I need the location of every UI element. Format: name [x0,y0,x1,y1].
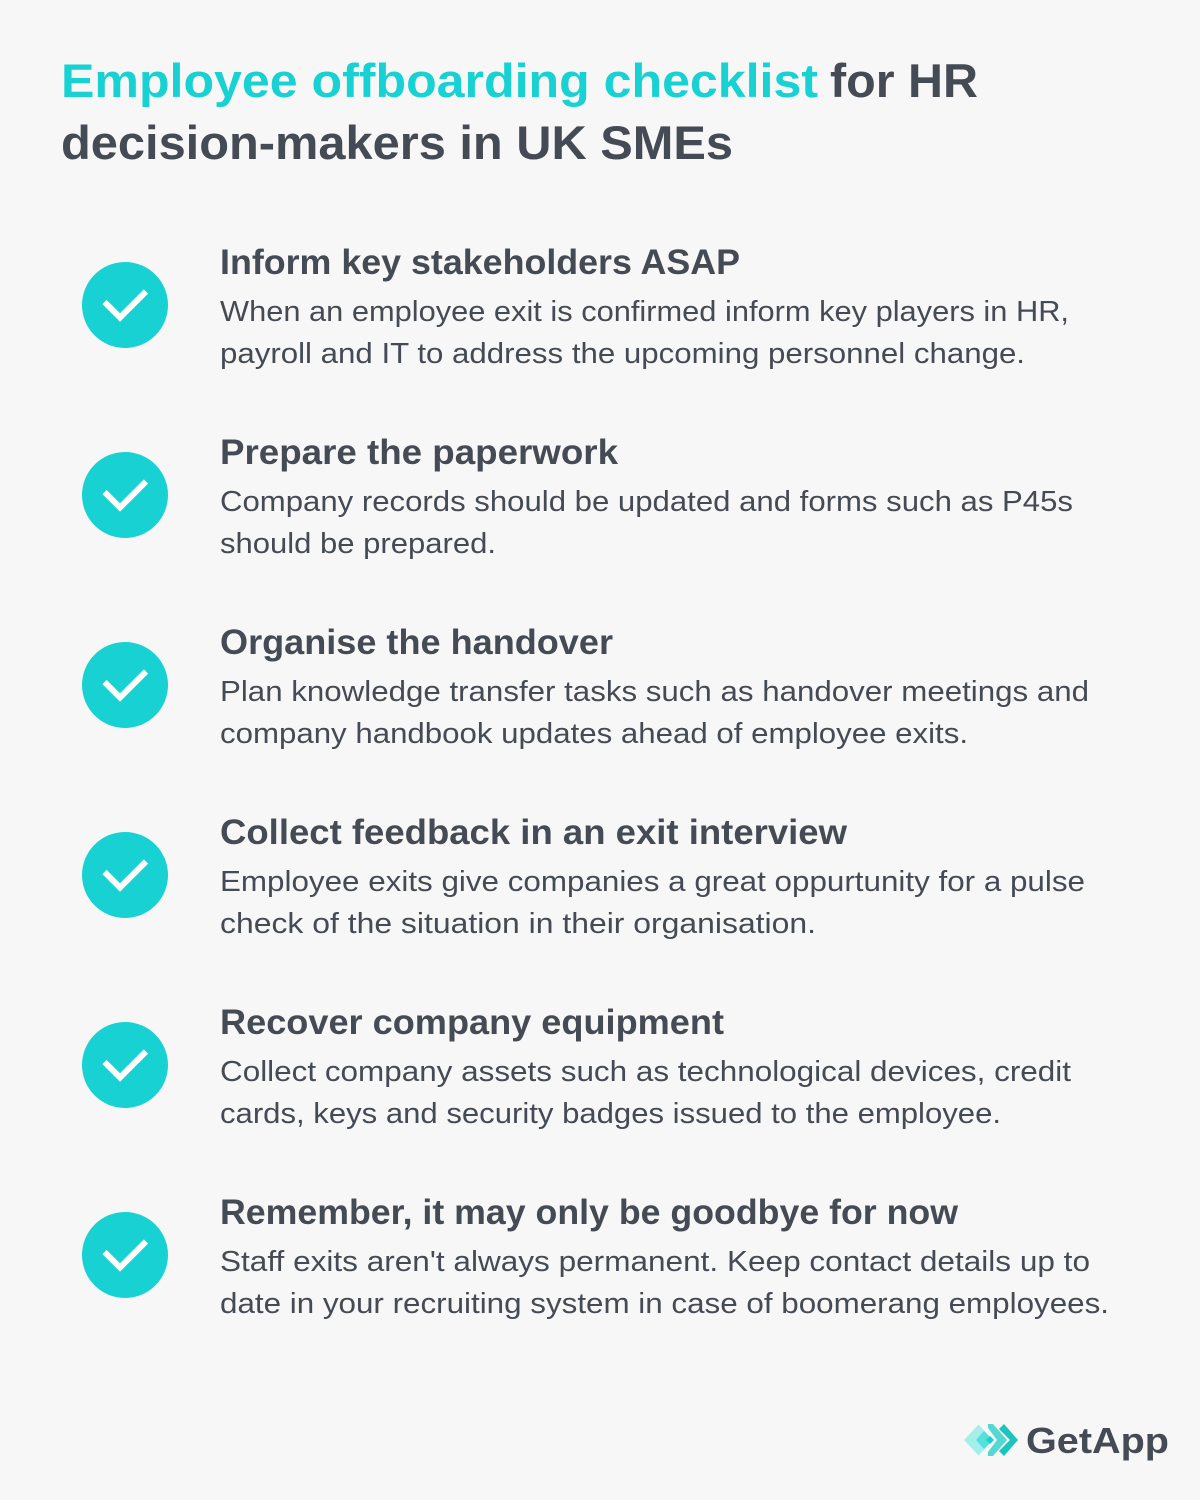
icon: GetApp diamonds [964,1424,1018,1456]
text block: goodbye: Staff exits aren't always permanent. Keep contact details up to [220,1246,1090,1278]
text block: equipment: Collect company assets such as technological devices, credit [220,1056,1071,1088]
text block: paperwork [220,486,1073,560]
text block: paperwork: Company records should be updated and forms such as P45s [220,486,1073,518]
heading: exit interview: Collect feedback in an exit interview [220,813,848,852]
title: Employee offboarding checklist [61,54,818,107]
icon: check circle [82,832,168,918]
text block: exit interview: Employee exits give companies a great oppurtunity for a pulse [220,866,1085,898]
icon: check circle [82,1022,168,1108]
heading: paperwork: Prepare the paperwork [220,433,619,472]
icon: check circle [82,642,168,728]
heading: handover: Organise the handover [220,623,613,662]
checklist item 4 [82,813,1085,940]
text block: exit interview: check of the situation in their organisation. [220,908,816,940]
checklist item 3 [82,623,1089,750]
text block: equipment [220,1056,1071,1130]
text block: paperwork: should be prepared. [220,528,496,560]
title: decision-makers in UK SMEs [61,116,733,169]
text block: handover: company handbook updates ahead of employee exits. [220,718,968,750]
checklist item 1 [82,243,1069,370]
icon: check circle [82,452,168,538]
text block: goodbye [220,1246,1109,1320]
text block: goodbye: date in your recruiting system in case of boomerang employees. [220,1288,1109,1320]
text block: equipment: cards, keys and security badges issued to the employee. [220,1098,1001,1130]
checklist item 2 [82,433,1073,560]
text block: exit interview [220,866,1085,940]
checklist item 5 [82,1003,1071,1130]
text block: handover [220,676,1089,750]
title: for HR [830,54,978,107]
icon: check circle [82,262,168,348]
icon: check circle [82,1212,168,1298]
text block: inform stakeholders: payroll and IT to address the upcoming personnel change. [220,338,1025,370]
heading: equipment: Recover company equipment [220,1003,724,1042]
title [61,54,978,169]
logo wordmark: GetApp [1026,1420,1169,1461]
checklist item 6 [82,1193,1109,1320]
heading: inform stakeholders: Inform key stakeholders ASAP [220,243,740,282]
text block: handover: Plan knowledge transfer tasks such as handover meetings and [220,676,1089,708]
text block: inform stakeholders [220,296,1069,370]
text block: inform stakeholders: When an employee exit is confirmed inform key players in HR, [220,296,1069,328]
GetApp logo [964,1420,1169,1461]
heading: goodbye: Remember, it may only be goodbye for now [220,1193,959,1232]
